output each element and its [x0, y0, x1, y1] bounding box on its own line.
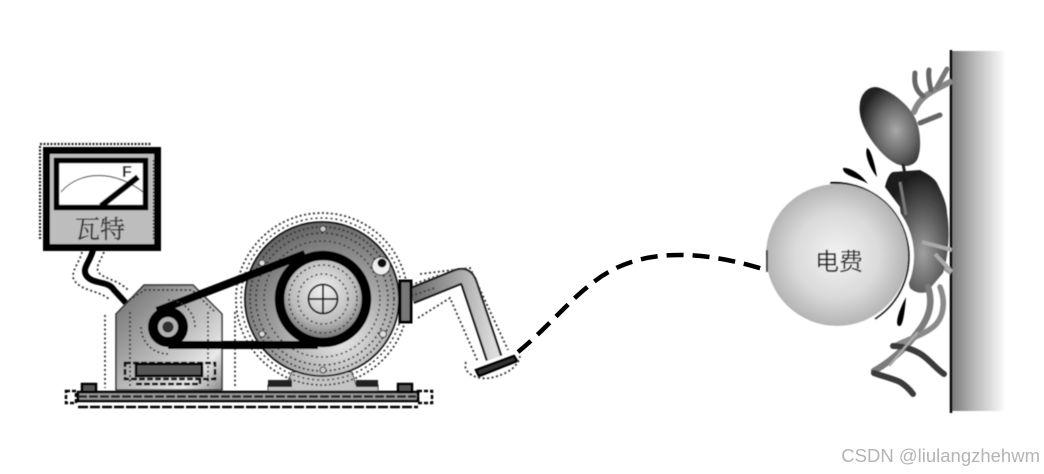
- figure torso: [885, 170, 949, 293]
- figure, ball and wall: [766, 50, 1006, 413]
- belt and pulleys: [141, 254, 366, 354]
- needle label F: F: [122, 164, 132, 181]
- figure chest stripe: [900, 182, 906, 215]
- figure lower arm highlights: [922, 242, 952, 272]
- gearbox housing: [105, 285, 235, 390]
- base plate: [66, 384, 432, 407]
- crank arm: [400, 268, 520, 378]
- wattmeter: [40, 144, 158, 248]
- figure legs: [874, 287, 944, 394]
- figure raised arm and hand: [914, 69, 950, 123]
- dotted cable outline: [73, 252, 128, 300]
- cable from meter to gearbox: [85, 250, 126, 303]
- motion marks: [843, 148, 906, 326]
- figure pressed against wall: [860, 69, 952, 394]
- watermark: CSDN @liulangzhehwm: [841, 445, 1040, 466]
- bill label: 电费: [815, 249, 863, 276]
- figure neck: [903, 164, 905, 174]
- wall: [951, 50, 1006, 413]
- generator body: [236, 213, 408, 391]
- needle: [101, 177, 138, 206]
- dashed trajectory: [518, 255, 766, 352]
- machine: wattmeter, generator and crank: [40, 144, 520, 407]
- bill ball: [766, 182, 914, 330]
- hub crosshair: [308, 284, 338, 314]
- figure head: [860, 87, 920, 166]
- figure lower arm: [917, 240, 952, 275]
- meter label: 瓦特: [75, 216, 125, 244]
